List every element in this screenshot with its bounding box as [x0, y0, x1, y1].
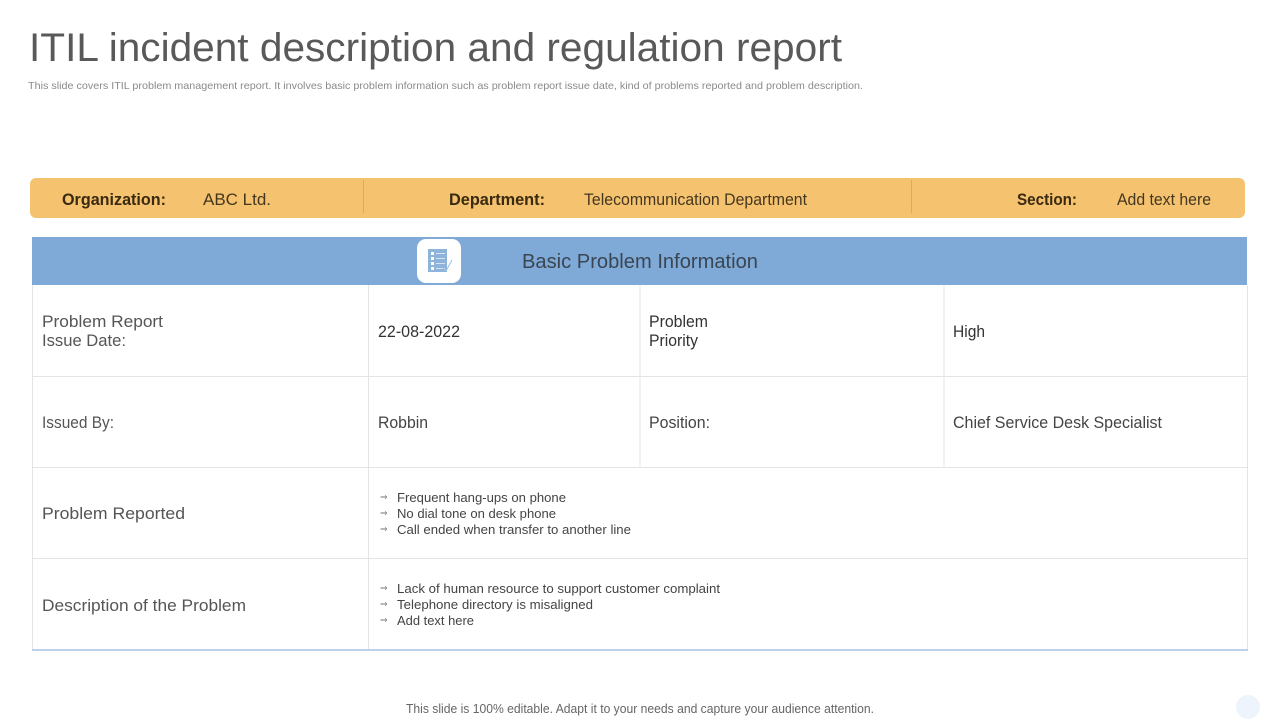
row 4: description list: Telephone directory is misaligned [397, 597, 593, 612]
organization value: ABC Ltd. [203, 190, 271, 209]
table header band [32, 237, 1247, 285]
row 2: position label: Position: [649, 413, 710, 432]
row 4: description list [380, 581, 720, 628]
title: ITIL incident description and regulation report [29, 26, 842, 70]
row 1: problem priority label: Problem [649, 312, 708, 331]
row 3: problem reported list: ⇒ [380, 509, 388, 519]
row 4: description list: Add text here [397, 613, 474, 628]
row 1: date value: 22-08-2022 [378, 322, 460, 341]
table header title: Basic Problem Information [522, 251, 758, 273]
department value: Telecommunication Department [584, 190, 807, 209]
section value: Add text here [1117, 190, 1211, 209]
row 1: problem report issue date label: Problem Report [42, 312, 163, 331]
icon: checklist [417, 239, 461, 283]
row 2: issued by label: Issued By: [42, 413, 114, 432]
row 3: problem reported label: Problem Reported [42, 504, 185, 523]
panel: basic problem information table [32, 237, 1248, 650]
row 4: description list: ⇒ [380, 584, 388, 594]
row 3: problem reported list: Frequent hang-ups on phone [397, 490, 566, 505]
row 1: problem report issue date label: Issue Date: [42, 331, 126, 350]
row 3: problem reported list: ⇒ [380, 493, 388, 503]
row 3: problem reported list: No dial tone on desk phone [397, 506, 556, 521]
subtitle description: This slide covers ITIL problem management report. It involves basic problem information such as problem report issue date, kind of problems reported and problem description. [28, 80, 863, 92]
row 4: description label: Description of the Problem [42, 596, 246, 615]
row 4: description list: Lack of human resource to support customer complaint [397, 581, 720, 596]
row 3: problem reported list [380, 490, 631, 537]
organization label: Organization: [62, 190, 166, 209]
row 2: issued by value: Robbin [378, 413, 428, 432]
row 1: problem priority label: Priority [649, 331, 698, 350]
panel: organization info bar [30, 178, 1245, 218]
row 4: description list: ⇒ [380, 600, 388, 610]
decorative corner circle [1236, 695, 1260, 719]
row 2: position value: Chief Service Desk Specialist [953, 413, 1162, 432]
department label: Department: [449, 190, 545, 209]
row 3: problem reported list: ⇒ [380, 525, 388, 535]
row 3: problem reported list: Call ended when transfer to another line [397, 522, 631, 537]
row 4: description list: ⇒ [380, 616, 388, 626]
row 1: priority value: High [953, 322, 985, 341]
footer note: This slide is 100% editable. Adapt it to your needs and capture your audience attention. [406, 702, 874, 716]
section label: Section: [1017, 190, 1077, 209]
